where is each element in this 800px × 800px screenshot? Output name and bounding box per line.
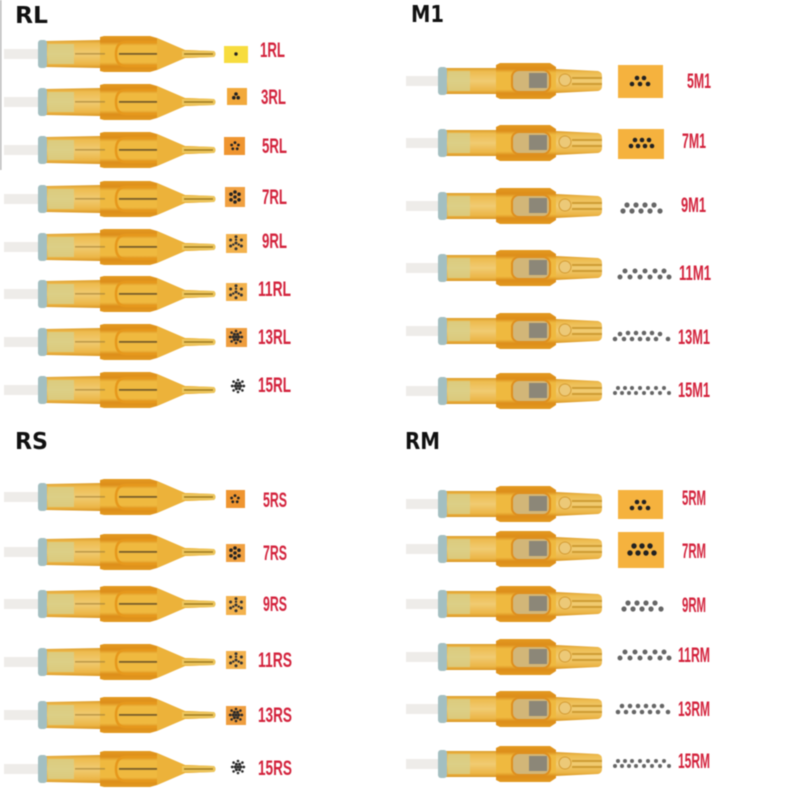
- panel: RL needles: [4, 3, 291, 408]
- row: 9M1: 9M1: [681, 194, 706, 217]
- row: 9RM: 9RM: [682, 594, 706, 617]
- heading: RM: RM: [405, 429, 440, 455]
- row: 1RL: [4, 36, 285, 72]
- row: 11RL: [4, 276, 291, 312]
- row: 11RM: 11RM: [678, 644, 710, 667]
- row: 15RS: [4, 751, 292, 787]
- row: 13RM: 13RM: [678, 698, 710, 721]
- row: 9RS: 9RS: [263, 593, 287, 616]
- row: 11M1: [406, 250, 711, 286]
- row: 7M1: [406, 125, 706, 161]
- row: 5RM: [406, 486, 706, 522]
- row: 7RL: [4, 181, 287, 217]
- row: 9M1: [406, 188, 706, 224]
- row: 13RS: 13RS: [258, 704, 292, 727]
- row: 5M1: 5M1: [687, 70, 711, 93]
- row: 13RL: 13RL: [258, 326, 291, 349]
- row: 11M1: 11M1: [679, 262, 711, 285]
- row: 15RL: 15RL: [258, 374, 291, 397]
- row: 9RL: 9RL: [262, 230, 287, 253]
- heading: M1: M1: [411, 2, 444, 28]
- row: 9RL: [4, 229, 287, 265]
- row: 15RS: 15RS: [258, 757, 292, 780]
- row: 7RS: [4, 534, 287, 570]
- row: 11RM: [406, 639, 710, 675]
- panel: RM needles: [405, 429, 710, 782]
- row: 3RL: 3RL: [261, 86, 286, 109]
- row: 7RS: 7RS: [263, 542, 287, 565]
- row: 7RM: 7RM: [682, 540, 706, 563]
- panel: M1 needles: [406, 2, 711, 409]
- row: 13M1: [406, 313, 710, 349]
- row: 3RL: [4, 84, 286, 120]
- row: 15RM: [406, 746, 710, 782]
- row: 1RL: 1RL: [260, 39, 285, 62]
- row: 9RM: [406, 586, 706, 622]
- row: 15RL: [4, 372, 291, 408]
- row: 5RL: [4, 132, 287, 168]
- row: 13RM: [406, 691, 710, 727]
- row: 13RL: [4, 324, 291, 360]
- panel: RS needles: [4, 429, 292, 787]
- row: 7RL: 7RL: [262, 186, 287, 209]
- row: 5RS: 5RS: [263, 489, 287, 512]
- row: 11RL: 11RL: [258, 278, 291, 301]
- row: 13RS: [4, 697, 292, 733]
- row: 13M1: 13M1: [678, 326, 710, 349]
- row: 15M1: 15M1: [678, 379, 710, 402]
- row: 15M1: [406, 373, 710, 409]
- row: 5M1: [406, 63, 711, 99]
- row: 7M1: 7M1: [682, 130, 706, 153]
- row: 5RM: 5RM: [682, 487, 706, 510]
- row: 9RS: [4, 586, 287, 622]
- row: 5RS: [4, 479, 287, 515]
- row: 15RM: 15RM: [678, 750, 710, 773]
- row: 11RS: [4, 644, 292, 680]
- row: 11RS: 11RS: [258, 649, 292, 672]
- heading: RS: RS: [15, 429, 48, 455]
- row: 7RM: [406, 531, 706, 568]
- row: 5RL: 5RL: [262, 135, 287, 158]
- heading: RL: RL: [15, 3, 48, 29]
